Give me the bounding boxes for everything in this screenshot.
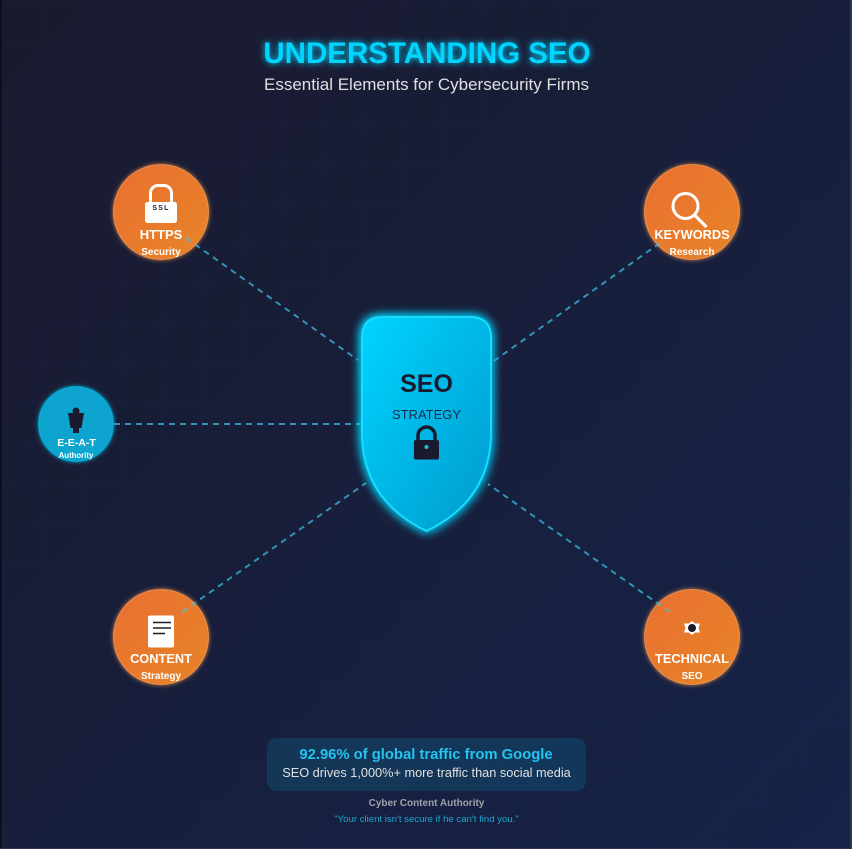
node: E-E-A-T	[38, 386, 114, 462]
connector lines	[114, 238, 670, 612]
icon: padlock	[414, 427, 439, 460]
label: Security: Security	[141, 247, 181, 258]
label: Authority: Authority	[59, 451, 94, 460]
node: TECHNICAL	[644, 590, 740, 684]
label: SEO: SEO	[681, 671, 703, 682]
label: E-E-A-T: E-E-A-T	[57, 437, 96, 449]
subtitle: Essential Elements for Cybersecurity Firms	[264, 75, 589, 94]
label: HTTPS: HTTPS	[140, 227, 183, 242]
icon: SSL padlock: SSL	[152, 205, 170, 212]
icon: magnifying glass	[673, 194, 706, 227]
label: Research: Research	[669, 247, 715, 258]
icon: document	[148, 616, 174, 648]
title: UNDERSTANDING SEO	[263, 37, 591, 70]
label: TECHNICAL: TECHNICAL	[655, 651, 729, 666]
node: KEYWORDS	[644, 164, 740, 260]
icon: authority badge	[68, 408, 84, 433]
central shield	[362, 317, 491, 531]
footer quote: "Your client isn't secure if he can't find you."	[334, 814, 519, 825]
node: HTTPS	[114, 164, 208, 260]
label: KEYWORDS: KEYWORDS	[654, 227, 730, 242]
footer brand: Cyber Content Authority	[369, 798, 485, 809]
stats box	[267, 738, 586, 791]
stat headline: 92.96% of global traffic from Google	[299, 747, 553, 763]
node: CONTENT	[114, 590, 208, 684]
label: SEO: SEO	[400, 370, 453, 398]
label: CONTENT: CONTENT	[130, 651, 192, 666]
label: Strategy: Strategy	[141, 671, 181, 682]
icon: gear	[684, 621, 700, 635]
stat detail: SEO drives 1,000%+ more traffic than social media	[282, 765, 572, 780]
label: STRATEGY: STRATEGY	[392, 407, 461, 422]
